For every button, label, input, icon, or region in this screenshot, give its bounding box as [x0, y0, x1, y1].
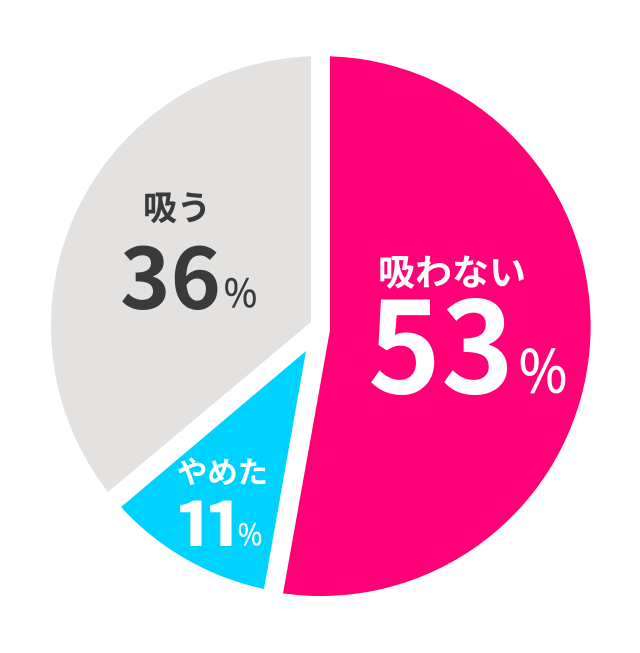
value: 11%: %: [238, 512, 262, 554]
label: 吸う: 吸う: [143, 181, 211, 230]
value: 53%: %: [519, 325, 567, 409]
value: 36%: %: [224, 263, 257, 319]
label: やめた: やめた: [177, 448, 268, 492]
value: 11%: 1: [202, 469, 247, 579]
slice: 吸う 36%: [51, 56, 311, 492]
value: 53%: 53: [368, 248, 514, 430]
slice: 吸わない 53%: [283, 56, 591, 596]
slice: やめた 11%: [121, 351, 306, 589]
value: 11%: 1: [172, 469, 217, 579]
value: 11%: [180, 500, 262, 546]
value: 36%: 36: [120, 213, 221, 334]
label: 吸わない: 吸わない: [378, 244, 526, 296]
pie chart: [51, 56, 591, 596]
